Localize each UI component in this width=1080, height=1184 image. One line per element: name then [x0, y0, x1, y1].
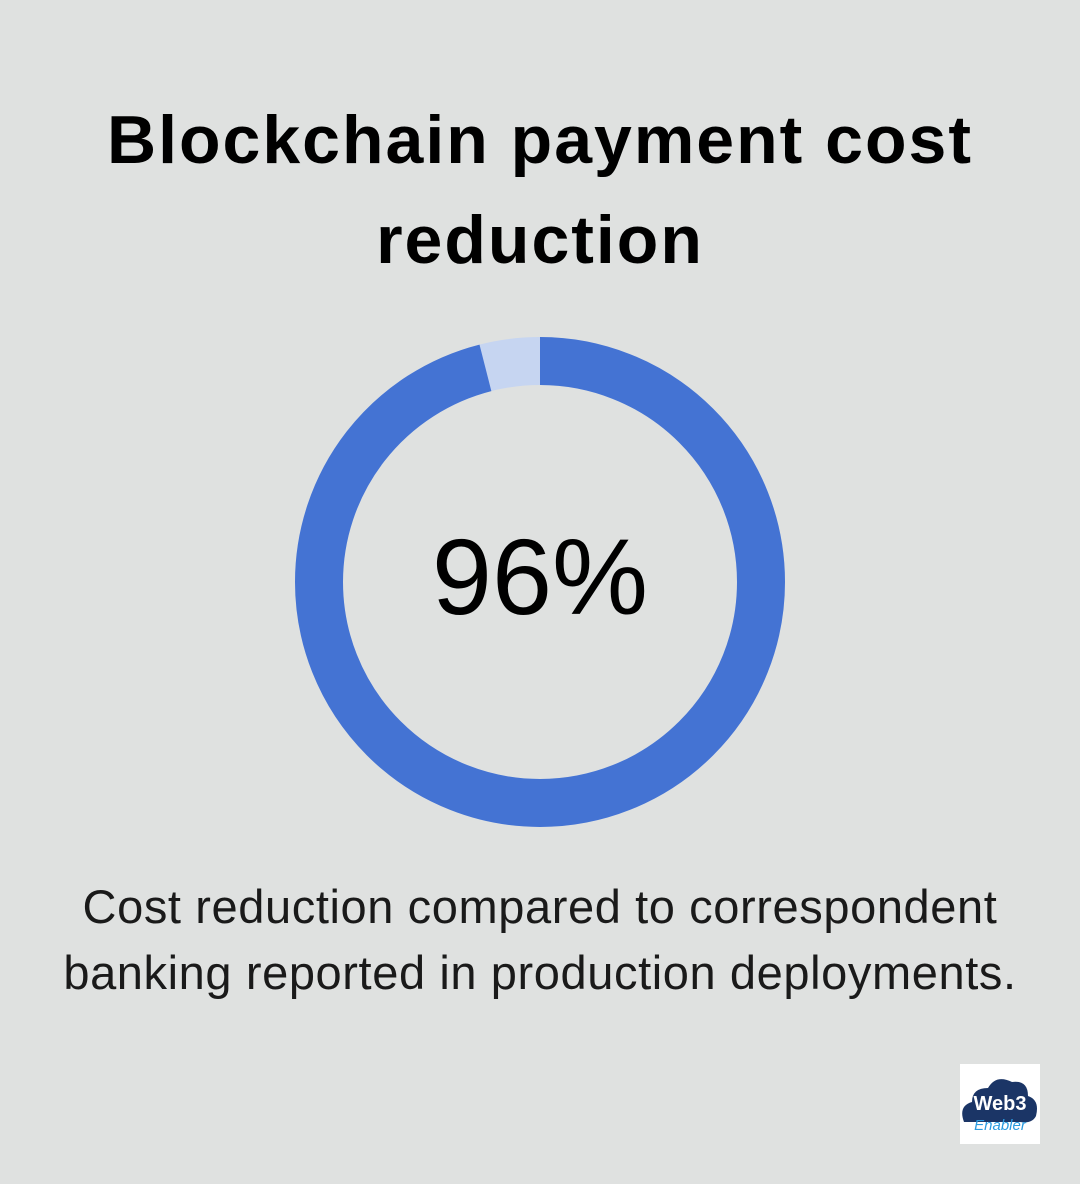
logo — [960, 1064, 1040, 1144]
description text: Cost reduction compared to correspondent — [83, 880, 997, 933]
donut chart: 96% — [432, 516, 648, 637]
title: reduction — [376, 202, 704, 278]
title — [107, 102, 973, 278]
description text: banking reported in production deployments. — [63, 946, 1017, 999]
logo: Enabler — [974, 1117, 1027, 1134]
title: Blockchain payment cost — [107, 102, 973, 178]
description text — [63, 880, 1017, 999]
logo: Web3 — [974, 1093, 1026, 1115]
